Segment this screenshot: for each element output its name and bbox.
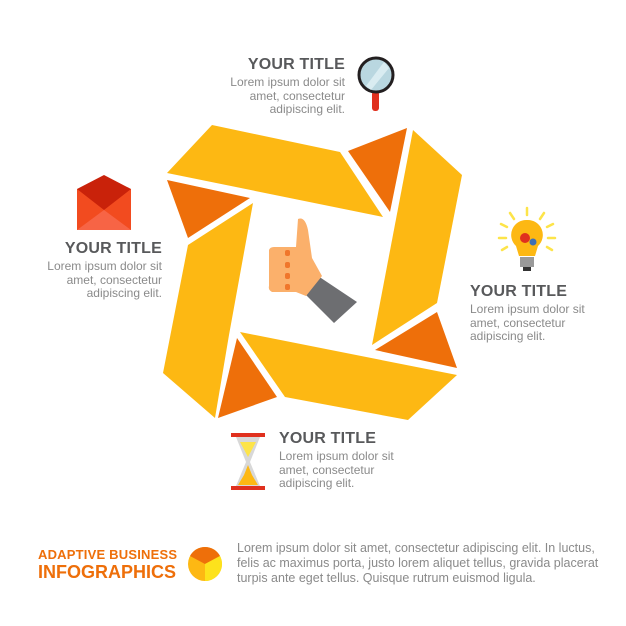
icon: thumbs up xyxy=(269,218,357,323)
block: left title xyxy=(47,240,162,300)
block: bottom title xyxy=(279,430,394,490)
icon: hourglass xyxy=(231,433,265,490)
text: bottom: Lorem ipsum dolor sit xyxy=(279,449,394,463)
band: right xyxy=(372,130,462,345)
text: right: adipiscing elit. xyxy=(470,329,545,343)
triangle: bottom-left xyxy=(218,338,277,418)
band: top xyxy=(167,125,383,217)
block: top title xyxy=(230,56,345,116)
heading: left: YOUR TITLE xyxy=(65,240,162,257)
text: right: Lorem ipsum dolor sit xyxy=(470,302,585,316)
footer text: Lorem ipsum dolor sit amet, consectetur adipiscing elit. In luctus, felis ac maximus porta, justo lorem aliquet tellus, gravida placerat turpis ante eget tellus. Quisque rutrum euismod ligula. xyxy=(237,541,598,585)
block: right title xyxy=(470,283,585,343)
text: left: amet, consectetur xyxy=(67,272,162,286)
heading: bottom: YOUR TITLE xyxy=(279,430,376,447)
text: bottom: amet, consectetur xyxy=(279,462,374,476)
brand heading xyxy=(38,547,177,582)
icon: envelope xyxy=(77,175,131,230)
icon: light bulb xyxy=(499,208,555,271)
text: left xyxy=(47,259,162,300)
band: left xyxy=(163,203,253,418)
triangle: top-right xyxy=(348,128,407,212)
text: top: amet, consectetur xyxy=(250,88,345,102)
text: right: amet, consectetur xyxy=(470,316,565,330)
brand heading: ADAPTIVE BUSINESS xyxy=(38,547,177,562)
heading: top: YOUR TITLE xyxy=(248,56,345,73)
text: right xyxy=(470,302,585,343)
text: top: adipiscing elit. xyxy=(270,102,345,116)
icon: magnifier xyxy=(359,58,393,111)
text: top xyxy=(230,75,345,116)
text: left: Lorem ipsum dolor sit xyxy=(47,259,162,273)
heading: right: YOUR TITLE xyxy=(470,283,567,300)
band: bottom xyxy=(240,332,457,420)
text: bottom: adipiscing elit. xyxy=(279,476,354,490)
icon: pie xyxy=(188,547,222,581)
brand heading: INFOGRAPHICS xyxy=(38,562,176,582)
text: bottom xyxy=(279,449,394,490)
text: top: Lorem ipsum dolor sit xyxy=(230,75,345,89)
triangle: top-left xyxy=(167,180,250,238)
triangle: bottom-right xyxy=(375,312,457,368)
text: left: adipiscing elit. xyxy=(87,286,162,300)
